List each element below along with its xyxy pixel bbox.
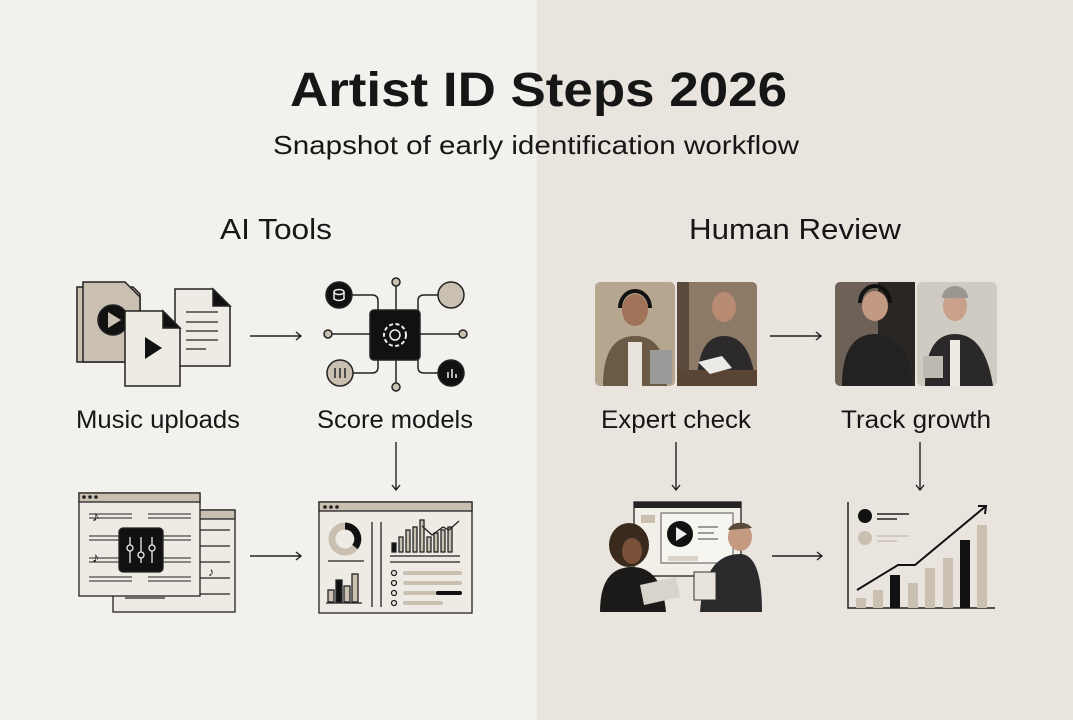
photo: track growth [835,282,997,386]
subtitle: Snapshot of early identification workflow [273,130,799,160]
icon: audio analysis windows: ♪ [92,508,99,524]
arrow [250,552,301,560]
icon: audio analysis windows: ♪ [92,549,99,565]
arrow [672,442,680,490]
icon: audio analysis windows [79,493,235,612]
arrow [916,442,924,490]
photo: review meeting [600,502,762,612]
arrow [772,552,822,560]
photo: expert check [595,282,757,386]
label: track growth: Track growth [841,406,991,434]
icon: music uploads [77,282,230,386]
title: Artist ID Steps 2026 [290,64,787,117]
icon: audio analysis windows: ♪ [208,565,214,579]
icon: dashboard [319,502,472,613]
label: expert check: Expert check [601,406,752,434]
heading: Human Review: Human Review [689,214,902,246]
chart: growth [848,502,995,608]
arrow [770,332,821,340]
label: music uploads: Music uploads [76,406,240,434]
icon: score models network [324,278,467,391]
heading: AI Tools: AI Tools [220,214,332,246]
arrow [392,442,400,490]
label: score models: Score models [317,406,473,434]
arrow [250,332,301,340]
